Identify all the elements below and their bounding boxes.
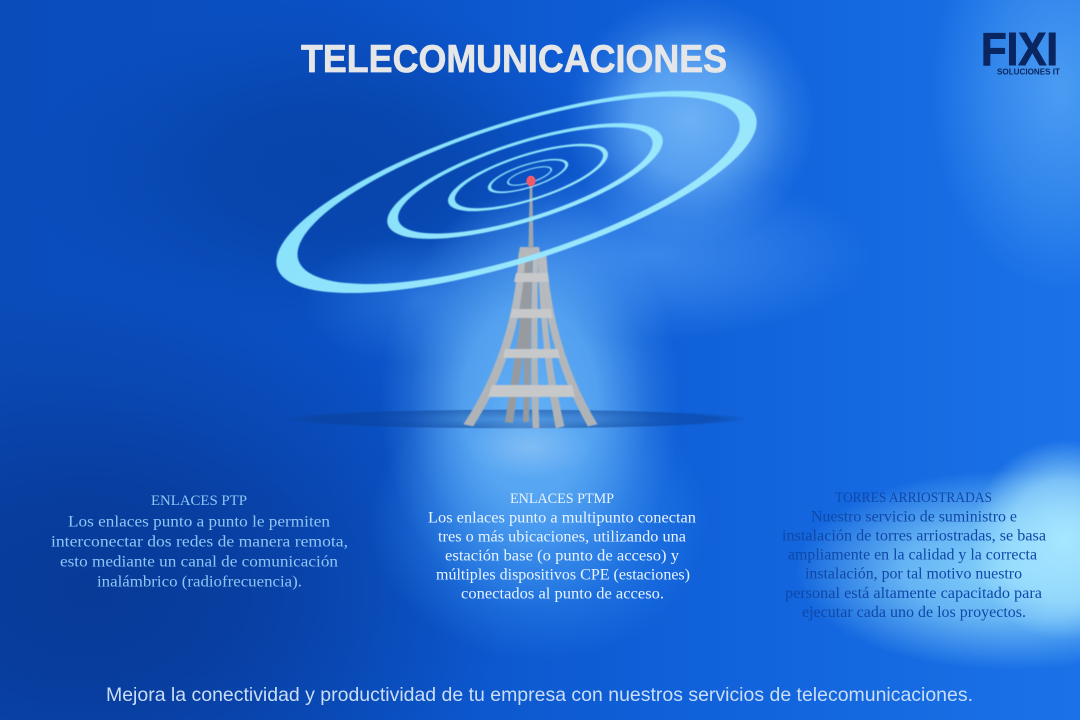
rear legs xyxy=(505,256,532,423)
tower top cap xyxy=(518,247,541,257)
ring 1 (outer) xyxy=(256,49,777,335)
ring 5 (inner) xyxy=(505,162,554,190)
text block: Torres Arriostradas xyxy=(782,490,1046,621)
text block: Enlaces PTMP: estación base (o punto de acceso) y xyxy=(445,548,679,564)
ring 3 xyxy=(441,130,615,225)
ring 4 xyxy=(484,152,572,200)
text block: Torres Arriostradas: ejecutar cada uno de los proyectos. xyxy=(802,604,1026,621)
mast xyxy=(528,186,534,248)
text block: Enlaces PTP: Los enlaces punto a punto le permiten xyxy=(68,514,330,530)
text block: Torres Arriostradas: instalación de torres arriostradas, se basa xyxy=(782,528,1046,544)
icon: red antenna beacon xyxy=(526,176,536,186)
logo: FIXI Soluciones IT: FIXI xyxy=(981,23,1058,75)
title: TELECOMUNICACIONES xyxy=(301,38,727,81)
text block: Enlaces PTMP: múltiples dispositivos CPE (estaciones) xyxy=(436,566,690,584)
ground shadow and tower reflection xyxy=(280,409,750,479)
text block: Torres Arriostradas: Nuestro servicio de suministro e xyxy=(811,508,1017,526)
text block: Enlaces PTP: ENLACES PTP xyxy=(151,493,247,509)
text block: Enlaces PTMP: Los enlaces punto a multipunto conectan xyxy=(428,510,696,526)
front legs xyxy=(464,254,597,428)
text block: Enlaces PTMP xyxy=(428,491,696,602)
text block: Enlaces PTP: esto mediante un canal de comunicación xyxy=(60,554,338,570)
text block: Enlaces PTP: interconectar dos redes de manera remota, xyxy=(51,534,348,550)
footer tagline: Mejora la conectividad y productividad de tu empresa con nuestros servicios de telecomunicaciones. xyxy=(106,684,973,706)
platforms xyxy=(488,273,575,397)
logo: FIXI Soluciones IT: SOLUCIONES IT xyxy=(997,66,1061,76)
text block: Torres Arriostradas: ampliamente en la calidad y la correcta xyxy=(788,546,1037,564)
text block: Enlaces PTMP: conectados al punto de acceso. xyxy=(461,586,664,602)
text block: Enlaces PTMP: ENLACES PTMP xyxy=(510,491,614,507)
text block: Torres Arriostradas: TORRES ARRIOSTRADAS xyxy=(835,490,992,506)
ring 2 xyxy=(376,99,674,263)
text block: Torres Arriostradas: instalación, por tal motivo nuestro xyxy=(805,566,1022,582)
text block: Enlaces PTP xyxy=(51,493,348,590)
text block: Enlaces PTMP: tres o más ubicaciones, utilizando una xyxy=(438,528,686,546)
text block: Enlaces PTP: inalámbrico (radiofrecuencia). xyxy=(97,574,302,590)
icon: antenna tower xyxy=(464,186,597,428)
icon: radio wave rings xyxy=(256,49,777,335)
text block: Torres Arriostradas: personal está altamente capacitado para xyxy=(785,585,1042,602)
